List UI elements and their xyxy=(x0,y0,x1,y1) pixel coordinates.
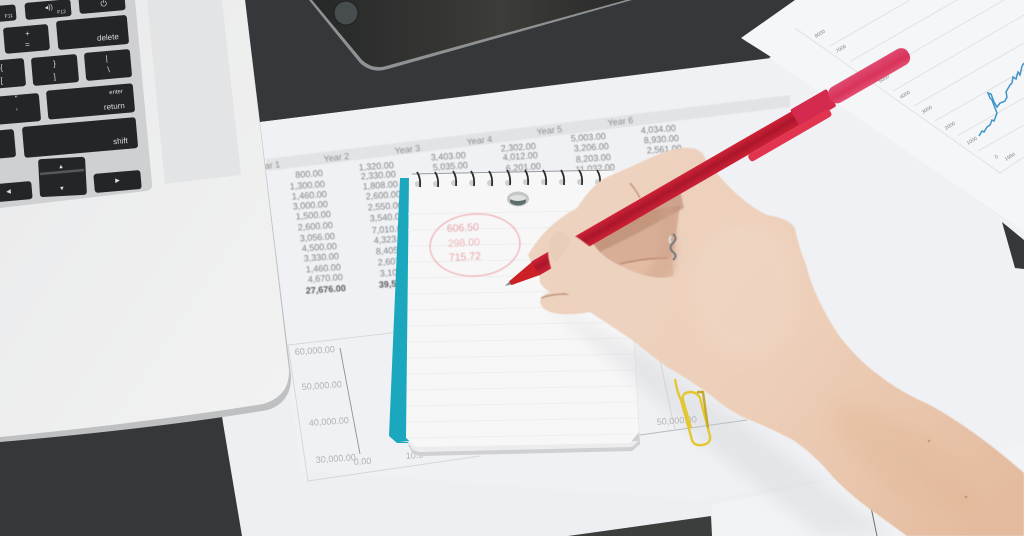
arrow key divider xyxy=(40,170,84,174)
chart: lower report chart xyxy=(288,332,747,481)
column: year 6: 4,034.00 xyxy=(640,123,676,135)
column: year 4 xyxy=(500,141,541,173)
thumbnail xyxy=(549,231,570,262)
skin moles xyxy=(928,440,930,442)
laptop speaker grille xyxy=(147,0,241,184)
column: year 2: 3,540.00 xyxy=(369,211,405,223)
key labels: ◂)) xyxy=(44,4,53,12)
knuckle highlight xyxy=(690,220,800,360)
sheet edge line xyxy=(871,507,877,536)
pen clip xyxy=(747,108,833,162)
handwritten note in red circle: 606.50 xyxy=(447,221,479,235)
table: yearly figures xyxy=(264,95,790,296)
panel: far right lower sheet xyxy=(712,440,1024,536)
key labels: [ xyxy=(0,76,4,85)
line chart xyxy=(795,0,1024,173)
column: year 1: 3,330.00 xyxy=(303,251,339,263)
paper clip xyxy=(675,379,710,445)
panel: dark desk gap at bottom xyxy=(568,516,712,536)
key labels: = xyxy=(25,40,31,49)
column: year 3: 5,035.00 xyxy=(432,160,468,172)
pen barrel xyxy=(531,111,801,275)
handwritten note in red circle: 715.72 xyxy=(449,250,481,264)
column: year 1: 1,300.00 xyxy=(289,179,325,191)
column: year 5 xyxy=(570,131,615,175)
column: year 4: 2,302.00 xyxy=(500,141,536,153)
key labels: } xyxy=(53,59,57,68)
column: year 2: 2,550.00 xyxy=(367,200,403,212)
column: year 1 xyxy=(289,168,346,296)
column: year 1: 1,460.00 xyxy=(305,262,341,274)
palm shadow xyxy=(640,190,677,282)
chart: lower report chart: 40,000.00 xyxy=(308,415,349,428)
column: year 2 xyxy=(358,160,419,290)
chart: lower report chart: 0.00 xyxy=(353,456,372,467)
chart: lower report chart: 10.0 xyxy=(405,450,424,461)
chart: lower report chart: 50,000.00 xyxy=(656,414,697,427)
column: year 1: 1,500.00 xyxy=(295,209,331,221)
key labels: ▲ xyxy=(58,164,64,171)
table header years: Year 6 xyxy=(607,115,634,128)
column: year 3 xyxy=(430,150,468,172)
column: year 6: 8,930.00 xyxy=(643,133,679,145)
line chart: 8000 xyxy=(814,29,827,40)
column: year 2: 7,010.00 xyxy=(371,223,407,235)
key labels: enter xyxy=(109,89,123,96)
column: year 4: 4,012.00 xyxy=(502,150,538,162)
line chart: 2000 xyxy=(944,121,957,132)
dark desk triangle xyxy=(1002,222,1024,269)
chart: lower report chart: 30,000.00 xyxy=(315,452,356,465)
pen cone xyxy=(506,262,540,290)
column: year 2: 4,323.00 xyxy=(373,233,409,245)
line chart: 5000 xyxy=(878,74,891,85)
back of hand, fingers and forearm xyxy=(528,148,1024,536)
key labels: + xyxy=(25,29,31,38)
column: year 6 xyxy=(640,123,682,155)
column: year 1: 1,460.00 xyxy=(291,189,327,201)
line chart: 4000 xyxy=(899,90,912,101)
keyboard keys xyxy=(0,0,142,203)
key labels: delete xyxy=(97,32,120,43)
pen collar xyxy=(790,89,836,127)
column: year 1: 4,670.00 xyxy=(307,272,343,284)
punched hole xyxy=(507,192,529,206)
ruled lines xyxy=(407,210,640,438)
key labels: ▶ xyxy=(115,178,121,184)
table header years: ar 1 xyxy=(264,159,281,171)
phone xyxy=(309,0,632,71)
column: year 1: 3,000.00 xyxy=(292,199,328,211)
line chart: 1000 xyxy=(966,136,979,147)
key labels: ' xyxy=(16,107,19,116)
panel: laptop xyxy=(0,0,291,442)
key labels xyxy=(0,0,129,195)
page stack xyxy=(408,340,640,456)
pen cap xyxy=(825,45,913,106)
spiral binding xyxy=(412,170,612,187)
keyboard well xyxy=(0,0,152,208)
column: year 1: 4,500.00 xyxy=(301,241,337,253)
table header band xyxy=(266,95,790,171)
column: year 2: 2,607.00 xyxy=(377,255,413,267)
column: year 5: 8,203.00 xyxy=(575,152,611,164)
panel: top right chart sheet xyxy=(741,0,1024,232)
column: year 1: 2,600.00 xyxy=(297,220,333,232)
top page xyxy=(406,169,639,447)
column: year 3: 3,403.00 xyxy=(430,150,466,162)
column: year 2: 3,100.00 xyxy=(379,266,415,278)
column: year 1: 3,056.00 xyxy=(299,231,335,243)
line chart: 7000 xyxy=(835,44,848,55)
table header years xyxy=(264,115,634,171)
ring xyxy=(670,234,676,260)
column: year 1: 800.00 xyxy=(295,168,323,180)
middle finger area xyxy=(590,206,680,269)
key labels: " xyxy=(15,94,18,103)
chart: lower report chart: 60,000.00 xyxy=(294,344,335,357)
column: year 2: 2,330.00 xyxy=(360,169,396,181)
table header years: Year 4 xyxy=(466,134,493,147)
table header years: Year 2 xyxy=(323,151,350,164)
forearm warm tone xyxy=(814,384,996,536)
line chart: 0 xyxy=(994,154,1000,161)
column: year 5: 3,206.00 xyxy=(573,141,609,153)
column: year 2: 1,320.00 xyxy=(358,160,394,172)
key labels: ◀ xyxy=(6,189,12,195)
column: year 2: 2,600.00 xyxy=(365,189,401,201)
key labels: F12 xyxy=(57,9,66,16)
line chart: 3000 xyxy=(921,105,934,116)
key labels: F11 xyxy=(4,13,13,20)
line chart: 1984 xyxy=(1004,152,1017,163)
chart: lower report chart: 50,000.00 xyxy=(301,379,342,392)
hand and arm xyxy=(528,148,1024,536)
key labels: return xyxy=(104,101,125,112)
panel: lower report sheet xyxy=(180,130,1024,536)
notepad xyxy=(389,169,640,456)
panel: main report sheet xyxy=(259,58,1024,500)
column: year 5: 11,032.00 xyxy=(575,162,615,175)
shadow under pen xyxy=(590,190,684,252)
handwritten note in red circle: 298.00 xyxy=(448,236,480,250)
finger creases xyxy=(541,183,668,298)
table header years: Year 5 xyxy=(536,124,563,137)
teal cover xyxy=(389,178,410,443)
pen tip xyxy=(504,281,512,288)
column: year 4: 6,201.00 xyxy=(505,161,541,173)
column: year 6: 2,561.00 xyxy=(646,143,682,155)
key labels: ▼ xyxy=(59,186,65,193)
hand shadow xyxy=(545,305,895,536)
column: year 2: 8,405.00 xyxy=(375,244,411,256)
key labels: ] xyxy=(53,72,56,81)
red pen xyxy=(500,44,917,300)
key labels: | xyxy=(105,54,108,63)
key labels: shift xyxy=(113,136,129,146)
column: year 2: 39,590.00 xyxy=(378,277,419,290)
dark desk strip above reports xyxy=(245,0,793,122)
thumb over pen xyxy=(548,230,675,345)
column: year 5: 5,003.00 xyxy=(570,131,606,143)
column: year 1: 27,676.00 xyxy=(305,283,346,296)
table header years: Year 3 xyxy=(394,143,421,156)
column: year 2: 1,808.00 xyxy=(362,179,398,191)
ring finger area xyxy=(620,258,674,282)
key labels: \ xyxy=(107,65,111,74)
handwritten note in red circle xyxy=(428,211,522,279)
phone camera xyxy=(334,1,358,25)
